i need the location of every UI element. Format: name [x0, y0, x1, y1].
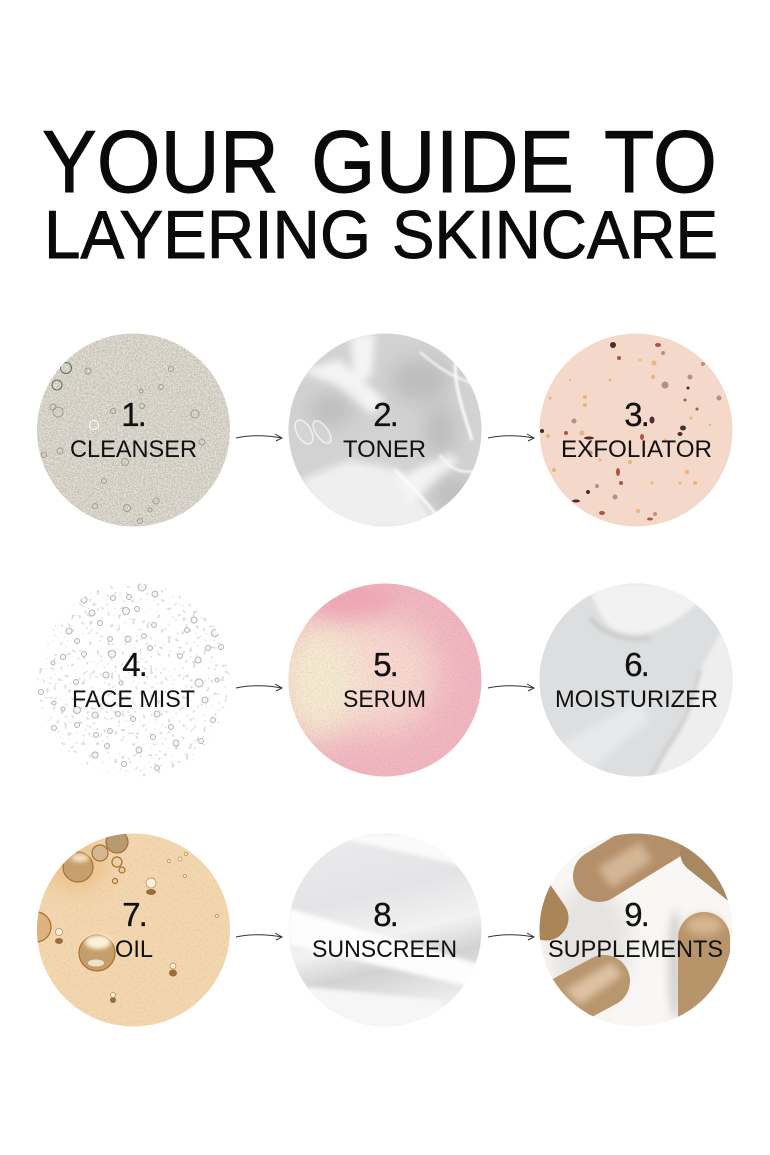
panel: step 4 face mist [37, 583, 231, 777]
step number and name [115, 896, 153, 963]
step number and name: 9. [624, 896, 648, 933]
title [42, 112, 718, 273]
step number and name [312, 896, 457, 963]
step number and name: 1. [121, 396, 145, 433]
panel: step 9 supplements [540, 834, 732, 1026]
arrow: step 5 to 6 [488, 684, 534, 691]
step number and name [72, 646, 195, 713]
title: LAYERING [44, 197, 371, 273]
step number and name: 2. [373, 396, 397, 433]
step number and name: 7. [122, 896, 146, 933]
panel: step 7 oil [21, 831, 231, 1027]
step number and name [343, 396, 426, 463]
panel: step 6 moisturizer [539, 583, 735, 780]
title: SKINCARE [392, 197, 718, 273]
title: TO [604, 112, 717, 211]
step number and name: SUPPLEMENTS [548, 936, 723, 963]
arrow: step 1 to 2 [236, 434, 282, 441]
arrow: step 7 to 8 [236, 933, 282, 940]
arrow: step 8 to 9 [488, 933, 534, 940]
step number and name: TONER [343, 436, 426, 463]
arrow: step 2 to 3 [488, 434, 534, 441]
step number and name: CLEANSER [70, 436, 197, 463]
step number and name: 5. [373, 646, 397, 683]
step number and name: EXFOLIATOR [561, 436, 712, 463]
panel: step 8 sunscreen [288, 833, 482, 1027]
step number and name: SUNSCREEN [312, 936, 457, 963]
step number and name: MOISTURIZER [555, 686, 718, 713]
panel: step 2 toner [288, 333, 482, 535]
panel: step 1 cleanser [37, 333, 231, 527]
step number and name: 4. [122, 646, 146, 683]
step number and name [548, 896, 723, 963]
step number and name [70, 396, 197, 463]
step number and name: FACE MIST [72, 686, 195, 713]
title: YOUR [42, 112, 279, 211]
title: GUIDE [311, 112, 574, 211]
step number and name [561, 396, 712, 463]
arrow: step 4 to 5 [236, 684, 282, 691]
step number and name: OIL [115, 936, 153, 963]
step number and name: SERUM [343, 686, 426, 713]
step number and name [343, 646, 426, 713]
step number and name [555, 646, 718, 713]
panel: step 3 exfoliator [539, 333, 733, 527]
step number and name: 6. [624, 646, 648, 683]
step number and name: 8. [373, 896, 397, 933]
panel: step 5 serum [276, 583, 482, 777]
step number and name: 3. [624, 396, 648, 433]
